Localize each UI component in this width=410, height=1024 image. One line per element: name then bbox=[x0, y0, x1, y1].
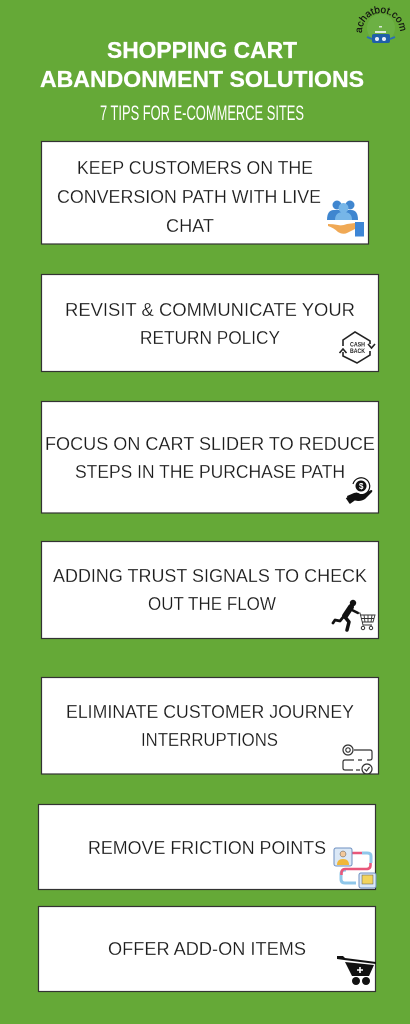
text: tip 4 bbox=[53, 565, 368, 614]
icon: cash back bbox=[340, 332, 375, 363]
logo: achatbot.com robot: achatbot.com bbox=[356, 6, 406, 33]
text: tip 6: REMOVE FRICTION POINTS bbox=[88, 837, 326, 858]
icon: hand with dollar coin: $ bbox=[359, 482, 364, 491]
panel: tip 3 cart slider bbox=[42, 402, 378, 513]
icon: hand with dollar coin bbox=[346, 478, 372, 504]
text: tip 2 bbox=[65, 299, 355, 348]
text: tip 1: KEEP CUSTOMERS ON THE bbox=[77, 157, 313, 178]
text: tip 4: OUT THE FLOW bbox=[148, 593, 276, 614]
icon: journey path bbox=[343, 745, 372, 774]
panel: tip 6 friction points bbox=[38, 804, 376, 890]
text: tip 1: CHAT bbox=[166, 215, 214, 236]
text: tip 1 bbox=[57, 157, 321, 236]
text: tip 7: OFFER ADD-ON ITEMS bbox=[108, 938, 306, 959]
title: ABANDONMENT SOLUTIONS bbox=[40, 66, 364, 92]
title bbox=[40, 37, 364, 92]
logo: achatbot.com robot bbox=[356, 6, 406, 43]
panel: tip 5 journey interruptions bbox=[42, 678, 378, 774]
panel: tip 1 live chat bbox=[42, 142, 368, 244]
text: tip 5: INTERRUPTIONS bbox=[141, 729, 278, 750]
text: tip 2: RETURN POLICY bbox=[140, 327, 280, 348]
text: tip 3: FOCUS ON CART SLIDER TO REDUCE bbox=[45, 433, 375, 454]
icon: flow between customer and cart bbox=[334, 848, 376, 888]
icon: customers on a hand bbox=[327, 200, 364, 236]
text: tip 4: ADDING TRUST SIGNALS TO CHECK bbox=[53, 565, 368, 586]
text: tip 5: ELIMINATE CUSTOMER JOURNEY bbox=[66, 701, 354, 722]
icon: shopping cart with plus bbox=[337, 956, 376, 985]
text: tip 1: CONVERSION PATH WITH LIVE bbox=[57, 186, 321, 207]
text: tip 3: STEPS IN THE PURCHASE PATH bbox=[75, 461, 345, 482]
text: tip 5 bbox=[66, 701, 354, 750]
icon: cash back: CASH bbox=[350, 342, 365, 348]
icon: person running with cart bbox=[333, 600, 375, 630]
panel: tip 2 return policy bbox=[42, 274, 378, 372]
text: tip 2: REVISIT & COMMUNICATE YOUR bbox=[65, 299, 355, 320]
panel: tip 4 trust signals bbox=[42, 542, 378, 638]
panel: tip 7 add-on items bbox=[38, 906, 376, 992]
title: SHOPPING CART bbox=[107, 37, 297, 63]
text: tip 3 bbox=[45, 433, 375, 482]
icon: cash back: BACK bbox=[350, 348, 365, 355]
